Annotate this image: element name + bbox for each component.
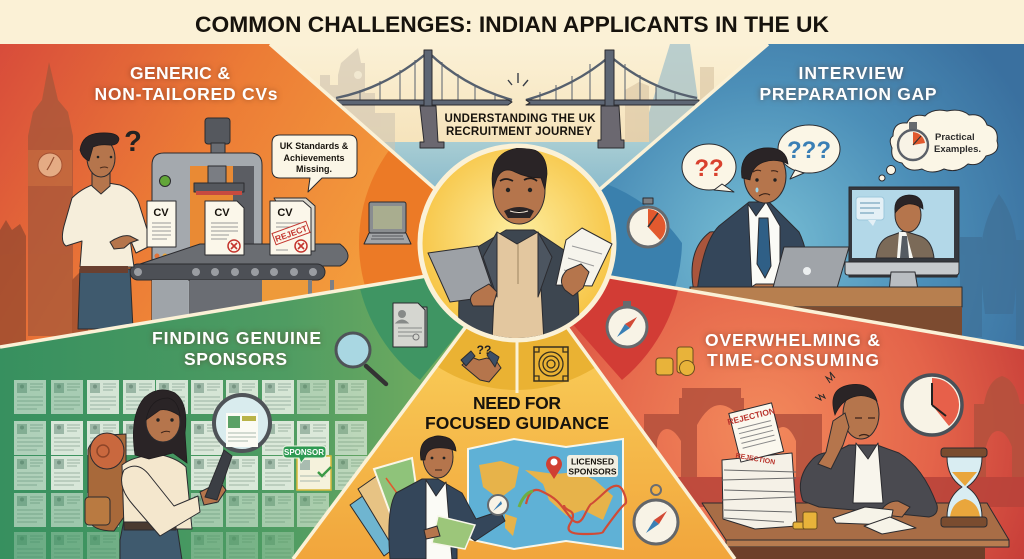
heading: generic and non-tailored CVs: NON-TAILORED CVs <box>94 84 278 104</box>
illustration: folded maps <box>350 458 419 556</box>
illustration: conveyor machine <box>130 118 348 340</box>
illustration: confused applicant <box>62 126 152 329</box>
icon: coin stacks <box>656 347 694 376</box>
text: understanding the UK recruitment journey: UNDERSTANDING THE UK <box>444 113 596 125</box>
heading: finding genuine sponsors: SPONSORS <box>184 349 287 369</box>
illustration: speech bubbles with question marks: ?? <box>694 155 724 182</box>
icon: laptop <box>364 202 411 244</box>
heading: overwhelming and time-consuming: OVERWHELMING & <box>705 330 880 350</box>
panel: overwhelming and time-consuming <box>570 278 1024 559</box>
illustration: desk <box>690 287 962 337</box>
illustration: large world map: SPONSORS <box>568 466 617 476</box>
illustration: city skyline <box>320 44 714 160</box>
central medallion: overwhelmed applicant <box>420 146 614 342</box>
illustration: CV documents: CV <box>153 207 169 219</box>
callout: UK standards missing <box>272 135 357 192</box>
icon: compass <box>607 301 647 347</box>
illustration: stressed man with head in hand <box>800 372 937 517</box>
illustration: Big Ben tower <box>0 62 88 350</box>
illustration: London Gherkin skyline <box>960 194 1024 340</box>
illustration: large world map <box>468 439 626 549</box>
illustration: nervous candidate at laptop <box>692 148 849 298</box>
illustration: thought cloud with stopwatch <box>879 110 998 181</box>
panel: finding genuine sponsors <box>0 278 464 559</box>
illustration: large world map: LICENSED <box>571 456 614 466</box>
illustration: desk <box>702 503 1009 559</box>
illustration: CV documents: CV <box>277 207 293 219</box>
panel: understanding the UK recruitment journey <box>308 44 730 188</box>
text: understanding the UK recruitment journey <box>445 114 596 135</box>
icon: crumpled papers in right hand <box>556 228 612 296</box>
illustration: man studying map with compass <box>389 436 508 559</box>
illustration: CV documents: CV <box>214 207 230 219</box>
icon: tablet held in left hand <box>428 246 497 306</box>
callout: UK standards missing: Missing. <box>296 164 332 174</box>
heading: finding genuine sponsors <box>152 328 321 369</box>
illustration: India Gate silhouette <box>512 376 1024 507</box>
panel: need for focused guidance <box>295 328 733 559</box>
illustration: broken bridge <box>336 50 699 148</box>
heading: interview preparation gap: PREPARATION GAP <box>760 84 937 104</box>
title: COMMON CHALLENGES: INDIAN APPLICANTS IN THE UK <box>195 12 830 37</box>
illustration: desk coins and papers <box>793 507 916 534</box>
icon: document <box>393 303 427 347</box>
illustration: rejection paper stack: REJECTION <box>726 405 776 427</box>
panel: interview preparation gap <box>602 44 1024 346</box>
illustration: woman with backpack and magnifier <box>85 390 232 559</box>
illustration: thought cloud with stopwatch: Practical <box>935 132 975 143</box>
illustration: thought cloud with stopwatch: Examples. <box>934 144 981 155</box>
icon: handshake: ?? <box>477 343 491 357</box>
icon: pocket compass <box>634 485 678 544</box>
icon: magnifying glass <box>336 333 386 384</box>
heading: generic and non-tailored CVs <box>94 63 278 104</box>
heading: need for focused guidance: NEED FOR <box>473 393 561 413</box>
heading: generic and non-tailored CVs: GENERIC & <box>130 63 230 83</box>
icon: highlighted sponsor card <box>283 446 331 490</box>
illustration: rejection paper stack <box>722 403 797 529</box>
heading: need for focused guidance: FOCUSED GUIDANCE <box>425 413 609 433</box>
heading: overwhelming and time-consuming: TIME-CONSUMING <box>707 350 879 370</box>
heading: finding genuine sponsors: FINDING GENUINE <box>152 328 321 348</box>
icon: wall clock <box>902 375 962 435</box>
icon: stopwatch <box>628 198 668 247</box>
panel: generic and non-tailored CVs <box>0 44 433 346</box>
illustration: video call monitor <box>845 187 959 296</box>
illustration: wall of candidate cards <box>14 380 367 559</box>
illustration: speech bubbles with question marks: ??? <box>787 137 831 164</box>
heading: interview preparation gap <box>760 63 937 104</box>
illustration: confused applicant: ? <box>124 126 142 158</box>
heading: overwhelming and time-consuming <box>705 330 880 370</box>
text: understanding the UK recruitment journey: RECRUITMENT JOURNEY <box>446 126 592 138</box>
heading: interview preparation gap: INTERVIEW <box>798 63 904 83</box>
illustration: speech bubbles with question marks <box>682 125 840 192</box>
illustration: rejection paper stack: REJECTION <box>735 453 776 466</box>
callout: UK standards missing: Achievements <box>283 153 345 163</box>
icon: handshake <box>461 343 501 382</box>
icon: maze <box>534 347 568 381</box>
illustration: CV documents: REJECT <box>274 223 309 244</box>
icon: highlighted sponsor card: SPONSOR <box>284 448 324 457</box>
heading: need for focused guidance <box>426 397 608 429</box>
illustration: large magnifier over sponsor card <box>214 395 270 451</box>
icon: hourglass <box>941 448 987 527</box>
illustration: CV documents <box>147 198 315 255</box>
callout: UK standards missing: UK Standards & <box>280 141 349 151</box>
